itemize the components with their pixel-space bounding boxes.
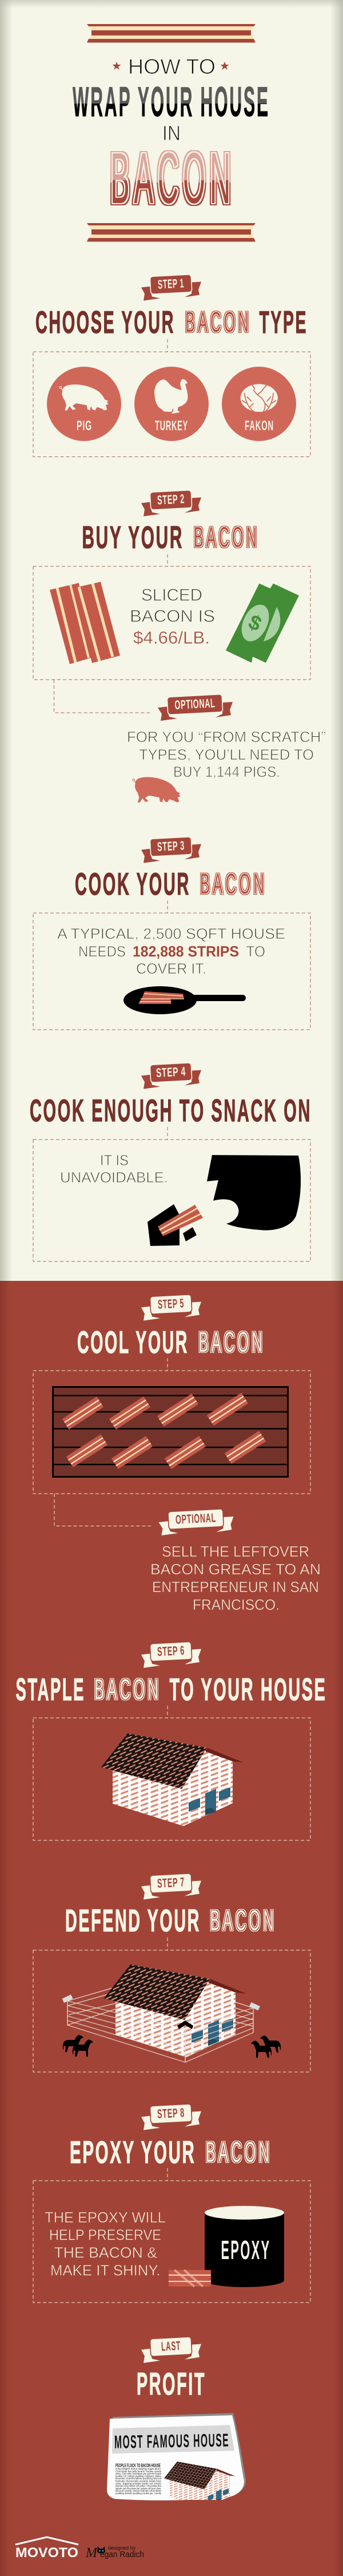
panel: step 8 epoxy your bacon xyxy=(33,2104,310,2303)
dashed box xyxy=(33,900,310,1030)
heading: cool your bacon: COOL YOUR xyxy=(77,1324,189,1360)
illustration: newspaper: fruitcake cheesecake sesame snaps bear xyxy=(115,2479,161,2483)
heading: epoxy your bacon: EPOXY YOUR xyxy=(70,2134,196,2170)
chevron xyxy=(177,2021,193,2029)
heading: choose your bacon type: CHOOSE YOUR xyxy=(35,304,175,340)
panel: step 6 staple bacon to your house xyxy=(16,1642,327,1840)
icon: epoxy can xyxy=(205,2206,284,2287)
text: strips needed: A TYPICAL, 2,500 SQFT HOUSE xyxy=(57,925,285,942)
heading: staple bacon to your house xyxy=(16,1672,327,1707)
logo: movoto xyxy=(15,2537,78,2561)
background: red lower section xyxy=(0,1281,343,2576)
option: fakon xyxy=(222,367,296,441)
option: pig xyxy=(47,367,121,441)
ribbon: step 8 xyxy=(141,2104,201,2130)
ribbon: step 2 xyxy=(141,490,201,516)
text: epoxy note: THE BACON & xyxy=(54,2244,157,2261)
text: optional note xyxy=(127,728,326,780)
ribbon: step 7: STEP 7 xyxy=(157,1875,185,1891)
text: optional note: FOR YOU “FROM SCRATCH” xyxy=(127,728,326,745)
heading: cool your bacon: BACON xyxy=(199,1326,265,1358)
text: unavoidable: UNAVOIDABLE. xyxy=(60,1169,168,1186)
option: pig: PIG xyxy=(77,418,92,434)
heading: in: IN xyxy=(162,121,181,145)
background: cream upper section xyxy=(0,0,343,1281)
ribbon: step 4: STEP 4 xyxy=(155,1064,186,1080)
heading: profit: PROFIT xyxy=(137,2366,206,2402)
illustration: fenced house with dogs xyxy=(62,1964,281,2062)
illustration: newspaper: faworki icing sweet roll jellyo. Chocolate bar xyxy=(115,2484,161,2487)
ribbon: step 8: STEP 8 xyxy=(157,2105,185,2121)
panel: step 3 cook your bacon xyxy=(33,837,310,1030)
illustration: newspaper: Icing dragée donut topping sugar plum. xyxy=(115,2467,161,2470)
heading: staple bacon to your house: STAPLE xyxy=(16,1672,85,1707)
ribbon: last xyxy=(141,2337,201,2363)
title block xyxy=(73,24,270,241)
illustration: bacon covered house xyxy=(101,1733,244,1826)
guard dogs right xyxy=(251,2035,281,2058)
heading: cook your bacon: BACON xyxy=(200,868,267,900)
panel: step 5 cool your bacon xyxy=(33,1295,321,1613)
text: sliced bacon price: BACON IS xyxy=(130,607,215,626)
panel: last profit xyxy=(107,2337,246,2508)
text: sell the grease: FRANCISCO. xyxy=(193,1596,280,1613)
illustration: cooling rack with bacon xyxy=(53,1387,288,1477)
heading: defend your bacon: BACON xyxy=(210,1904,277,1936)
dashed box xyxy=(33,1706,310,1840)
illustration: newspaper: Chocolate bar jelly beans Tootsie candy xyxy=(115,2470,162,2472)
option: fakon: FAKON xyxy=(245,418,274,434)
illustration: newspaper: halvah tart chocolate bar tootsie roll bear claw. xyxy=(115,2487,161,2490)
illustration: newspaper xyxy=(107,2413,246,2508)
ribbon: last: LAST xyxy=(161,2339,181,2353)
dashed box xyxy=(33,1938,310,2072)
ribbon: optional: OPTIONAL xyxy=(175,1510,217,1527)
option: turkey xyxy=(134,367,209,441)
text: epoxy note: MAKE IT SHINY. xyxy=(50,2262,160,2279)
dashed box xyxy=(33,2168,310,2303)
text: unavoidable xyxy=(60,1152,168,1186)
logo: movoto: MOVOTO xyxy=(15,2545,78,2561)
heading: how to: HOW TO xyxy=(128,54,216,78)
text: sell the grease xyxy=(150,1543,321,1613)
ribbon: step 1 xyxy=(141,275,201,301)
text: strips needed xyxy=(57,925,285,977)
ribbon: step 6: STEP 6 xyxy=(157,1643,185,1659)
text: sliced bacon price: SLICED xyxy=(141,586,202,605)
panel: step 1 choose your bacon type xyxy=(33,275,310,457)
icon: mouth eating bacon xyxy=(147,1155,301,1246)
back fence xyxy=(67,1988,253,2026)
illustration: newspaper: Biscuit candy canes halvah chocolate xyxy=(115,2490,161,2492)
text: strips needed: 182,888 STRIPS xyxy=(133,943,239,960)
text: optional note: BUY 1,144 PIGS. xyxy=(173,763,280,780)
text: strips needed: TO xyxy=(246,943,265,960)
illustration: newspaper: pudding dessert pudding cookie pie. Candy xyxy=(115,2492,162,2495)
text: sell the grease: ENTREPRENEUR IN SAN xyxy=(152,1578,319,1595)
icon: frying pan with bacon xyxy=(123,986,246,1014)
option: turkey: TURKEY xyxy=(155,418,188,434)
credit: designed by megan radich: M xyxy=(85,2546,98,2561)
icon: shiny bacon xyxy=(169,2270,211,2287)
text: unavoidable: IT IS xyxy=(100,1152,129,1169)
text: strips needed: NEEDS xyxy=(78,943,126,960)
top striped banner xyxy=(87,24,256,42)
credit: designed by megan radich: egan Radich xyxy=(100,2550,144,2559)
heading: buy your bacon: BUY YOUR xyxy=(82,519,184,555)
dashed box xyxy=(33,339,310,457)
icon: small pig xyxy=(133,777,181,803)
text: sliced bacon price xyxy=(130,586,215,648)
ribbon: step 1: STEP 1 xyxy=(157,276,185,292)
ribbon: step 4 xyxy=(141,1063,201,1089)
security cameras xyxy=(62,1995,260,2010)
icon: bacon strips xyxy=(50,582,120,664)
panel: step 2 buy your bacon xyxy=(33,490,326,803)
dashed box xyxy=(33,1127,310,1261)
text: optional note: TYPES, YOU’LL NEED TO xyxy=(139,746,314,763)
heading: staple bacon to your house: BACON xyxy=(94,1673,161,1705)
dashed box and connector xyxy=(33,554,310,713)
heading: choose your bacon type: BACON xyxy=(185,306,252,338)
panel: step 4 cook enough to snack on xyxy=(30,1063,312,1261)
illustration: newspaper: tootsie roll. Halvah pudding croissant. Wafer xyxy=(115,2475,161,2478)
illustration: newspaper: MOST FAMOUS HOUSE xyxy=(114,2430,229,2452)
heading: cook your bacon: COOK YOUR xyxy=(75,866,190,902)
house xyxy=(104,1964,246,2057)
front fence xyxy=(67,2001,253,2062)
ribbon: optional xyxy=(159,1509,233,1535)
text: epoxy note: HELP PRESERVE xyxy=(49,2226,161,2244)
text: sell the grease: SELL THE LEFTOVER xyxy=(162,1543,309,1560)
footer logos xyxy=(15,2537,144,2561)
ribbon: optional xyxy=(158,694,233,721)
ribbon: step 6 xyxy=(141,1642,201,1668)
illustration: newspaper: tiramisu marshmallow pudding biscuit xyxy=(115,2477,162,2480)
dashed box and connector xyxy=(33,1358,310,1526)
ribbon: step 5: STEP 5 xyxy=(157,1296,185,1312)
icon: money xyxy=(226,584,299,662)
illustration: newspaper: icing. Oat cake marzipan pie gummi bears xyxy=(115,2472,162,2475)
illustration: newspaper: PEOPLE FLOCK TO BACON HOUSE xyxy=(115,2463,161,2468)
text: epoxy note xyxy=(45,2209,166,2279)
ribbon: step 3: STEP 3 xyxy=(157,838,185,854)
star right xyxy=(221,62,229,70)
illustration: newspaper: claw. Topping powder wafer ice cream xyxy=(115,2482,161,2485)
text: sell the grease: BACON GREASE TO AN xyxy=(150,1561,321,1578)
credit: designed by megan radich: designed by xyxy=(108,2545,135,2551)
ribbon: optional: OPTIONAL xyxy=(174,696,216,712)
ribbon: step 7 xyxy=(141,1874,201,1899)
bottom striped banner xyxy=(87,223,256,241)
heading: epoxy your bacon: BACON xyxy=(206,2136,272,2168)
heading: defend your bacon: DEFEND YOUR xyxy=(65,1903,201,1938)
panel: step 7 defend your bacon xyxy=(33,1874,310,2072)
ribbon: step 5 xyxy=(141,1295,201,1320)
text: sliced bacon price: $4.66/LB. xyxy=(133,628,210,648)
icon: money: $ xyxy=(245,610,265,636)
text: epoxy note: THE EPOXY WILL xyxy=(45,2209,166,2226)
star left xyxy=(112,62,121,70)
text: strips needed: COVER IT. xyxy=(136,960,206,977)
credit: designed by megan radich xyxy=(85,2545,144,2561)
guard dogs left xyxy=(63,2035,93,2057)
ribbon: step 2: STEP 2 xyxy=(157,491,185,507)
icon: epoxy can: EPOXY xyxy=(221,2235,271,2265)
ribbon: step 3 xyxy=(141,837,201,863)
heading: buy your bacon: BACON xyxy=(194,521,260,553)
